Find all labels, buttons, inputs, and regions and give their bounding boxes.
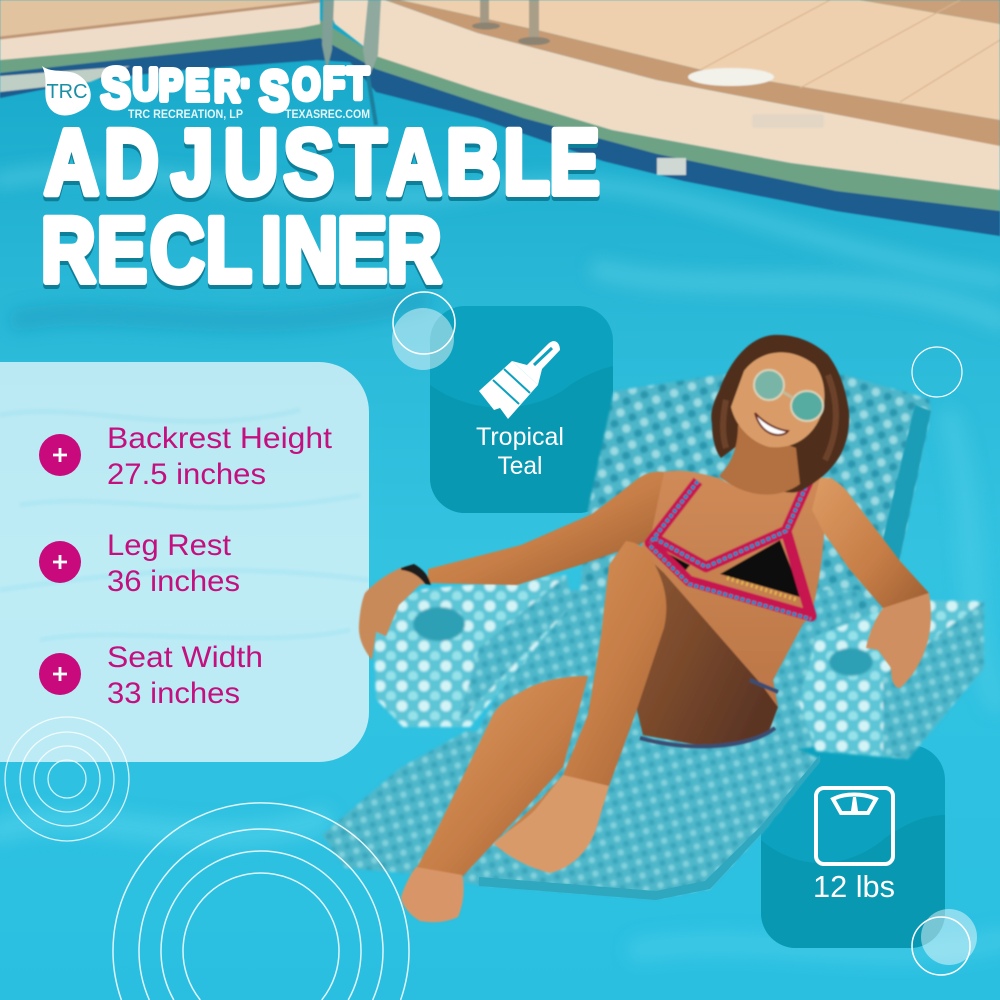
left hand — [359, 567, 430, 660]
logo drop badge — [42, 66, 91, 115]
title: ADJUSTABLE — [44, 110, 600, 213]
right arm — [812, 478, 929, 625]
woman — [359, 335, 931, 922]
plus bullet — [39, 541, 81, 583]
logo wordmark: F — [323, 59, 345, 108]
logo wordmark: E — [186, 61, 209, 110]
smile — [755, 413, 788, 435]
float: seat — [470, 590, 860, 775]
float: leg section — [322, 731, 820, 900]
panel: colour — [430, 306, 613, 513]
bubble lower right — [912, 909, 977, 975]
far arm — [428, 472, 664, 585]
colour label: Tropical — [476, 423, 564, 451]
logo website: TEXASREC.COM — [285, 109, 370, 121]
ring upper right — [912, 347, 962, 397]
colour label: Teal — [498, 452, 542, 480]
ladder rails — [322, 0, 334, 70]
tile marker — [657, 158, 686, 175]
colour label — [476, 423, 564, 480]
plus bullet — [39, 434, 81, 476]
title: ADJUSTABLE — [44, 114, 600, 217]
spec: leg rest: 36 inches — [107, 565, 240, 598]
logo wordmark: S — [259, 59, 289, 122]
neck — [719, 425, 800, 494]
left deck — [0, 0, 320, 60]
pool deck and tile edge — [0, 0, 1000, 236]
float: backrest — [575, 375, 931, 640]
sunglasses — [754, 370, 823, 421]
spec: backrest height: Backrest Height — [107, 422, 333, 455]
hair — [711, 335, 849, 493]
logo wordmark: U — [133, 60, 158, 109]
skimmer lid — [688, 68, 774, 86]
logo wordmark: R — [214, 62, 240, 111]
watch band — [401, 564, 431, 585]
logo drop badge: TRC — [46, 81, 88, 103]
logo wordmark: P — [159, 61, 183, 110]
near thigh — [625, 557, 778, 745]
weight label: 12 lbs — [813, 869, 895, 904]
concentric rings bottom — [113, 803, 409, 1000]
right hand — [866, 593, 931, 688]
deck marks — [752, 114, 824, 128]
near foot — [494, 775, 609, 873]
logo company line: TRC RECREATION, LP — [128, 109, 243, 121]
far leg — [416, 676, 588, 877]
decorative circles — [5, 292, 977, 1000]
float: left armrest — [374, 575, 571, 727]
right coping — [325, 0, 1000, 190]
logo wordmark: S — [101, 56, 131, 119]
near shin — [494, 541, 666, 873]
panel: weight — [761, 745, 945, 948]
concentric rings left — [5, 717, 129, 841]
spec: seat width: 33 inches — [107, 677, 240, 710]
float: backrest edge — [872, 405, 931, 590]
logo wordmark: · — [241, 61, 251, 106]
panel: dimensions — [0, 362, 369, 762]
title: RECLINER — [41, 198, 442, 301]
spec: backrest height: 27.5 inches — [107, 458, 266, 491]
torso — [620, 471, 838, 745]
logo: TRC Super-Soft — [42, 56, 370, 122]
icon: paintbrush — [479, 341, 560, 419]
spec: leg rest: Leg Rest — [107, 529, 232, 562]
cream strip lower left — [0, 66, 130, 92]
spec: backrest height — [39, 422, 333, 491]
plus bullet — [39, 653, 81, 695]
bubble near colour panel — [392, 292, 455, 370]
green coping — [0, 20, 1000, 211]
tile band — [0, 37, 1000, 236]
bikini top — [650, 481, 811, 619]
title: RECLINER — [41, 202, 442, 305]
icon: scale — [816, 788, 893, 864]
far foot — [401, 867, 464, 922]
spec: seat width: Seat Width — [107, 641, 263, 674]
upper paving — [400, 0, 1000, 120]
face — [731, 352, 824, 447]
logo wordmark: O — [293, 60, 320, 109]
paver band — [385, 0, 1000, 146]
bikini bottom — [640, 680, 778, 746]
product photo: float and woman — [322, 335, 984, 922]
spec: seat width — [39, 641, 263, 710]
spec: leg rest — [39, 529, 240, 598]
ladder posts — [480, 0, 489, 24]
float: right armrest — [799, 600, 984, 759]
title — [41, 110, 600, 305]
logo wordmark: T — [347, 59, 369, 108]
